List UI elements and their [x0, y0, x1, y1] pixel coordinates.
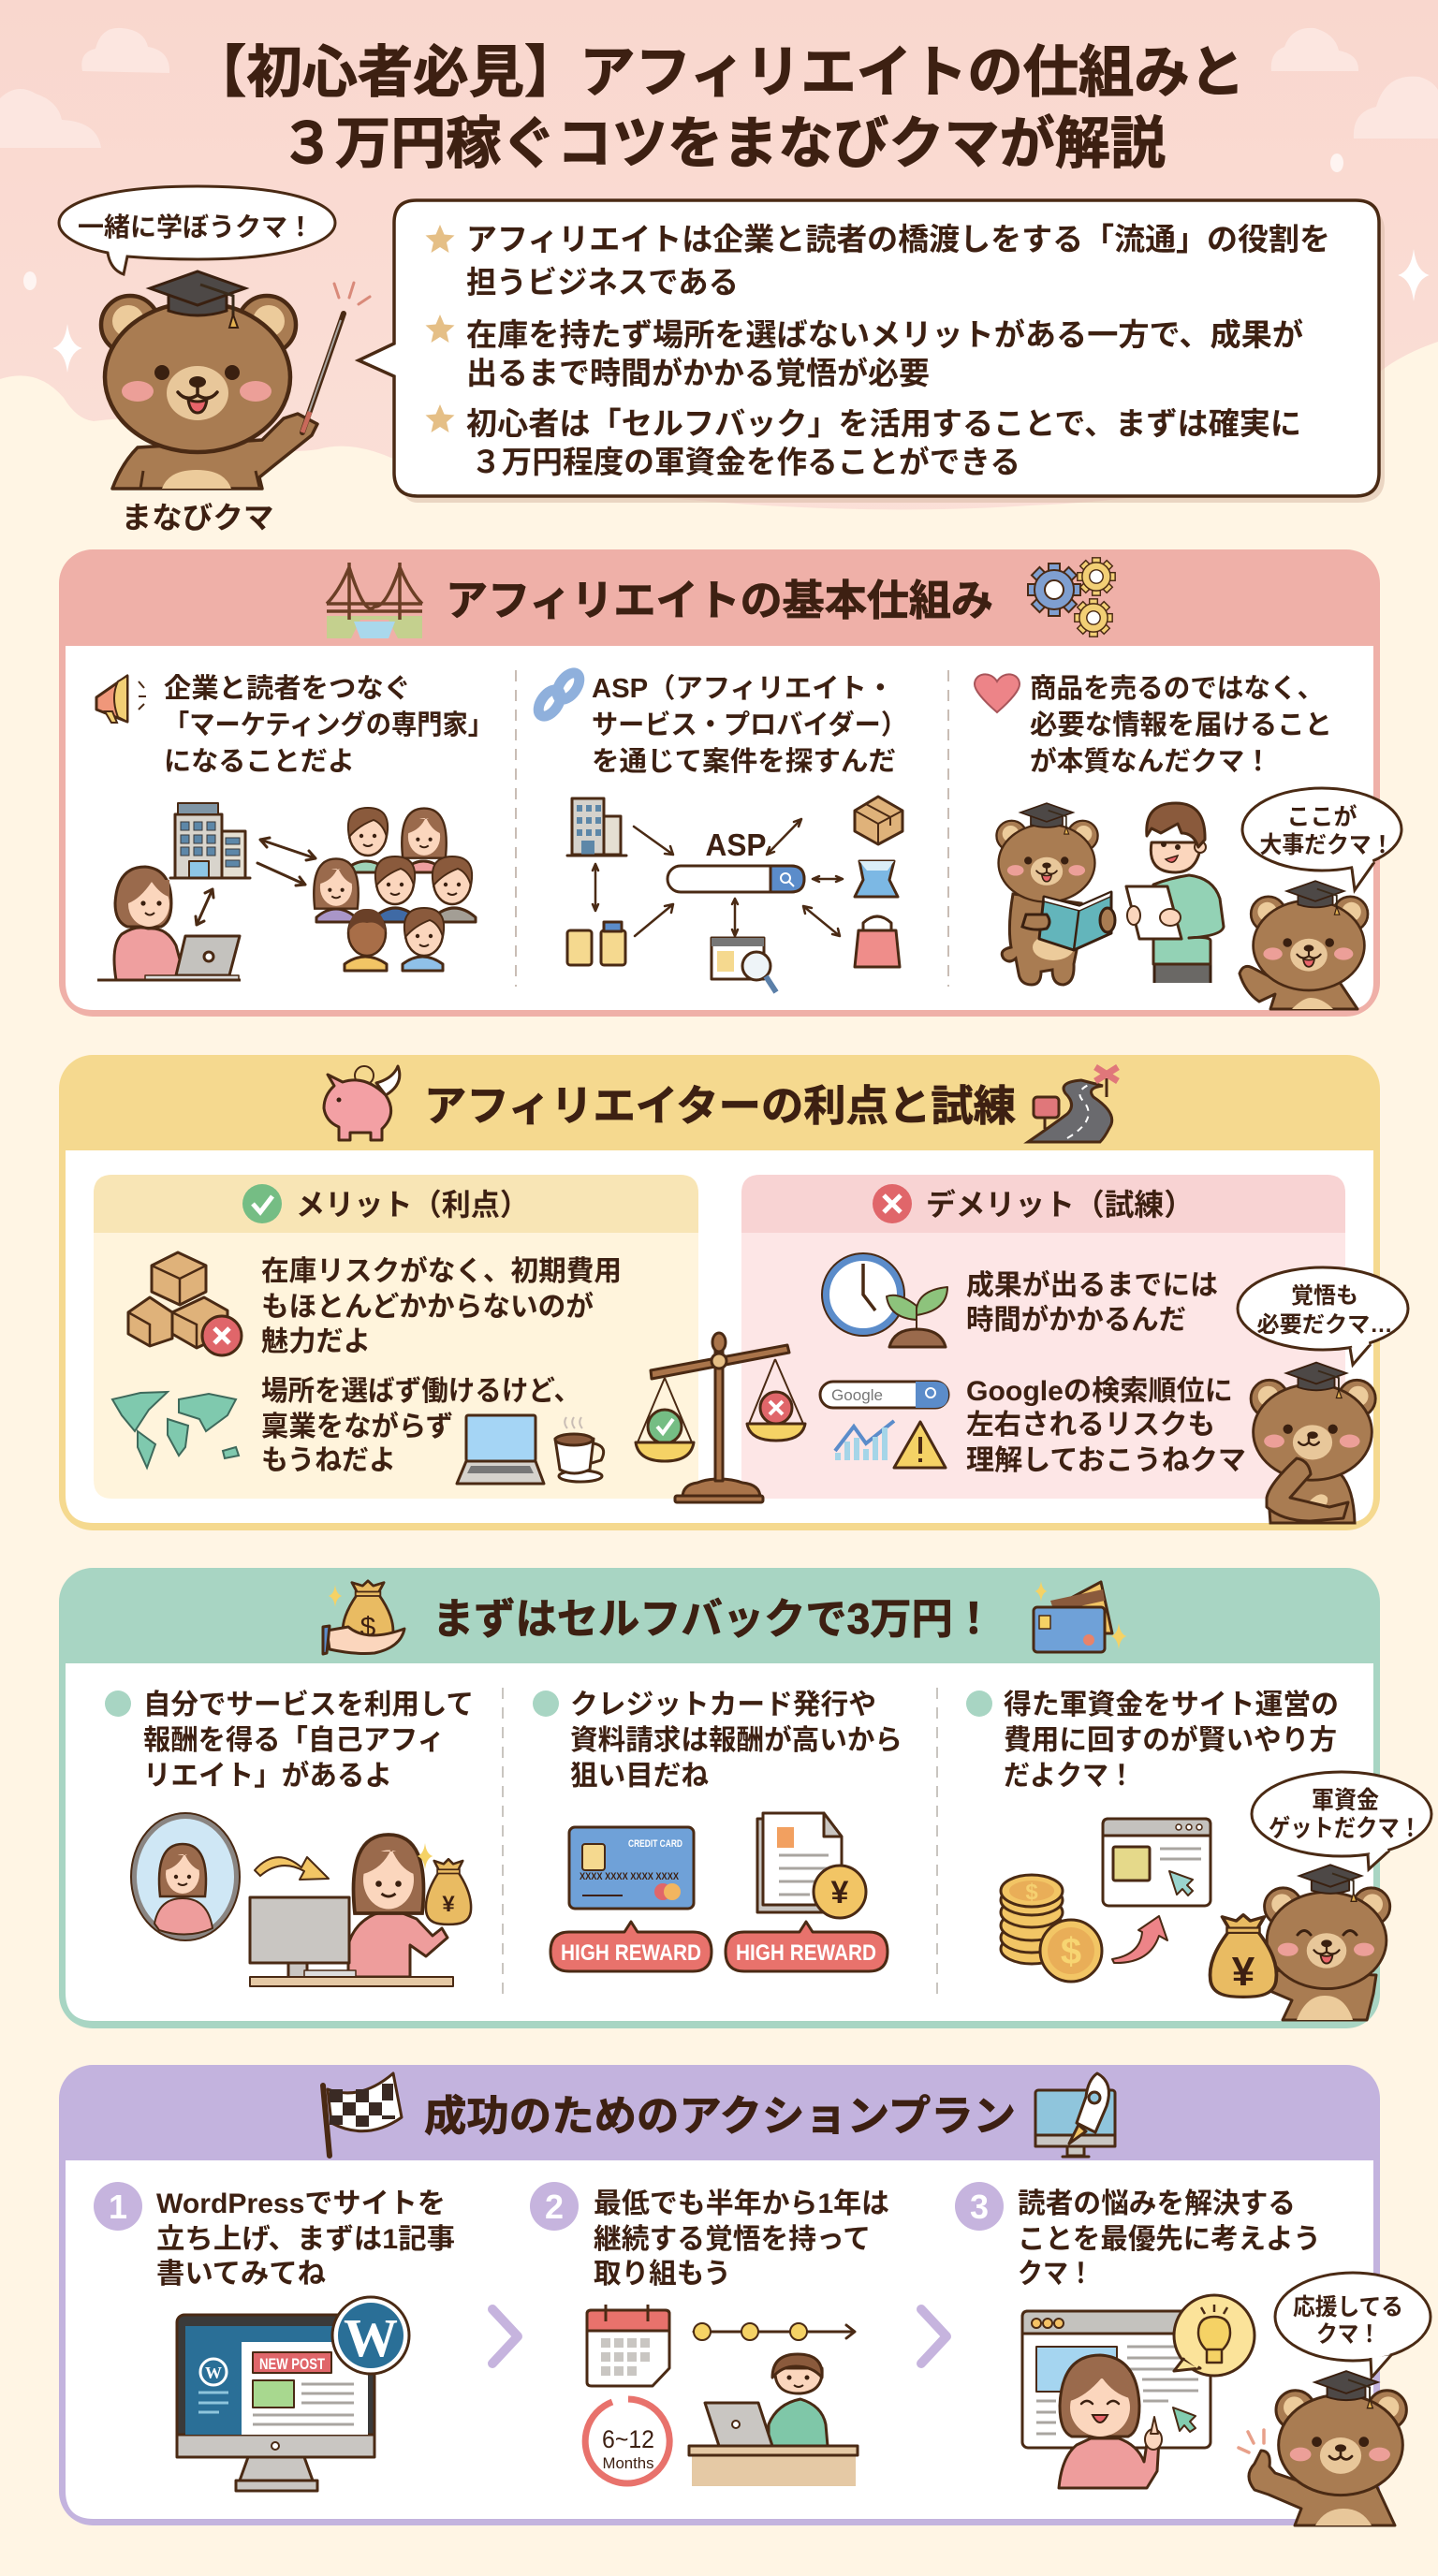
title [191, 41, 1245, 175]
text: invest capital [966, 1690, 1339, 1792]
text: work anywhere: 場所を選ばず働けるけど、 [261, 1376, 580, 1407]
speech bubble: learn together: 一緒に学ぼうクマ！ [78, 212, 314, 242]
speech bubble: cheering [1275, 2273, 1431, 2378]
illustration: reader focus [1022, 2295, 1255, 2488]
step 1: 書いてみてね [156, 2259, 326, 2290]
callout: key points: 初心者は「セルフバック」を活用することで、まずは確実に [466, 406, 1301, 441]
text: essence: が本質なんだクマ！ [1030, 745, 1271, 777]
illustration: coins, browser and arrow: $ [1025, 1880, 1038, 1905]
icon: world map [112, 1392, 239, 1468]
icon: bridge [327, 563, 422, 638]
text: google risk: 理解しておこうねクマ [966, 1445, 1246, 1476]
heading: 成功のためのアクションプラン [424, 2092, 1016, 2140]
text: takes time: 成果が出るまでには [966, 1269, 1218, 1301]
mascot: thumbs-up bear [1239, 2371, 1406, 2525]
illustration: WordPress on monitor: W [205, 2364, 222, 2382]
icon: piggy bank [324, 1066, 400, 1140]
icon: credit cards [1034, 1581, 1126, 1652]
callout: key points: アフィリエイトは企業と読者の橋渡しをする「流通」の役割を [466, 222, 1330, 256]
illustration: self purchase: ¥ [442, 1892, 455, 1917]
heading: アフィリエイターの利点と試練 [424, 1082, 1016, 1130]
badge: high reward: HIGH REWARD [561, 1940, 701, 1966]
text: no inventory risk: 在庫リスクがなく、初期費用 [261, 1255, 622, 1287]
text: ASP [592, 674, 907, 777]
text: takes time [966, 1269, 1218, 1336]
step 2: 2 [545, 2188, 564, 2226]
icon: megaphone [96, 676, 146, 723]
illustration: document with yen [757, 1813, 866, 1918]
icon: balance scale [636, 1333, 805, 1502]
icon: boxes with x [128, 1252, 242, 1355]
mascot bear with pointer [101, 271, 370, 489]
text: self affiliate [105, 1690, 474, 1792]
icon: search ranking warning [820, 1382, 948, 1468]
text: self affiliate: 報酬を得る「自己アフィ [143, 1725, 445, 1756]
text: invest capital: 得た軍資金をサイト運営の [1004, 1690, 1339, 1720]
text: takes time: 時間がかかるんだ [966, 1304, 1186, 1336]
text: marketing specialist: になることだよ [164, 747, 355, 777]
illustration: WordPress on monitor: W [344, 2307, 398, 2368]
text: ASP: ASP（アフィリエイト・ [592, 674, 894, 704]
subpanel: merits: メリット（利点） [296, 1188, 529, 1222]
callout: key points: ３万円程度の軍資金を作ることができる [471, 445, 1020, 479]
mascot name: まなびクマ [122, 501, 273, 534]
text: ASP: を通じて案件を探すんだ [592, 746, 896, 777]
text: no inventory risk: もほとんどかからないのが [261, 1291, 594, 1323]
subpanel: trials: デメリット（試練） [926, 1188, 1194, 1222]
text: no inventory risk [261, 1255, 622, 1357]
text: work anywhere [261, 1376, 580, 1476]
icon: 6 to 12 months ring [585, 2399, 669, 2483]
badge: high reward [726, 1922, 888, 1971]
step 3: ことを最優先に考えよう [1018, 2224, 1321, 2255]
mascot: happy bear with money [1211, 1865, 1390, 2020]
subpanel: merits [94, 1175, 698, 1499]
illustration: document with yen: ¥ [831, 1875, 849, 1910]
speech bubble: learn together [59, 186, 335, 274]
illustration: person at desk [689, 2354, 858, 2486]
panel: self-back [59, 1568, 1431, 2028]
speech bubble: important [1242, 788, 1401, 890]
text: invest capital: 費用に回すのが賢いやり方 [1004, 1724, 1337, 1756]
text: marketing specialist: 企業と読者をつなぐ [164, 673, 411, 704]
text: no inventory risk: 魅力だよ [261, 1326, 371, 1357]
text: google risk [966, 1376, 1246, 1476]
title: 【初心者必見】アフィリエイトの仕組みと [191, 41, 1245, 104]
icon: gears [1028, 558, 1115, 637]
heading: まずはセルフバックで3万円！ [433, 1595, 994, 1643]
icon: hand with money bag [323, 1581, 404, 1654]
icon: chain [534, 669, 584, 720]
text: ASP: サービス・プロバイダー） [592, 709, 907, 740]
illustration: credit card [569, 1827, 694, 1909]
text: google risk: Googleの検索順位に [966, 1376, 1233, 1407]
icon: search ranking warning: Google [831, 1386, 883, 1404]
text: invest capital: だよクマ！ [1004, 1761, 1135, 1792]
speech bubble: got capital: ゲットだクマ！ [1269, 1814, 1421, 1842]
speech bubble: important: 大事だクマ！ [1260, 832, 1393, 858]
illustration: WordPress on monitor [177, 2297, 409, 2491]
text: essence: 必要な情報を届けること [1030, 710, 1332, 740]
step 3: クマ！ [1018, 2259, 1093, 2290]
diagram: ASP network: ASP [706, 827, 766, 862]
panel: basic mechanism [59, 549, 1401, 1017]
text: work anywhere: もうねだよ [261, 1445, 396, 1476]
text: credit card: 狙い目だね [570, 1761, 709, 1792]
callout: key points [359, 200, 1385, 503]
icon: 6 to 12 months ring: Months [603, 2454, 653, 2472]
speech bubble: resolve [1238, 1267, 1408, 1365]
illustration: coins, browser and arrow: $ [1061, 1931, 1081, 1972]
speech bubble: resolve: 覚悟も [1291, 1283, 1358, 1309]
icon: heart [975, 674, 1020, 712]
callout: key points: 在庫を持たず場所を選ばないメリットがある一方で、成果が [466, 317, 1303, 352]
illustration: self purchase [131, 1813, 471, 1986]
arrow [492, 2309, 518, 2364]
speech bubble: cheering: 応援してる [1293, 2294, 1403, 2320]
step 3 [955, 2182, 1321, 2290]
text: essence [1030, 673, 1332, 777]
subpanel: trials [741, 1175, 1345, 1499]
text: essence: 商品を売るのではなく、 [1030, 673, 1324, 704]
illustration: credit card: CREDIT CARD [628, 1838, 682, 1850]
panel: merits and trials [59, 1055, 1408, 1530]
illustration: WordPress on monitor: NEW POST [259, 2355, 325, 2373]
text: credit card: 資料請求は報酬が高いから [570, 1724, 902, 1756]
callout: key points: 出るまで時間がかかる覚悟が必要 [466, 356, 930, 390]
badge: high reward [550, 1922, 712, 1971]
step 3: 3 [970, 2188, 989, 2226]
step 2: 最低でも半年から1年は [594, 2188, 889, 2219]
icon: coffee [555, 1417, 604, 1482]
step 2: 取り組もう [594, 2259, 731, 2290]
mascot: small bear [1240, 881, 1368, 1009]
badge: high reward: HIGH REWARD [736, 1940, 876, 1966]
step 3: 読者の悩みを解決する [1018, 2188, 1296, 2219]
illustration: calendar and timeline [587, 2305, 855, 2386]
text: credit card: クレジットカード発行や [570, 1690, 876, 1720]
arrow [921, 2309, 946, 2364]
title: ３万円稼ぐコツをまなびクマが解説 [280, 112, 1166, 175]
diagram: ASP network [567, 797, 902, 992]
speech bubble: got capital: 軍資金 [1312, 1786, 1379, 1814]
step 1: WordPressでサイトを [156, 2188, 446, 2219]
icon: clock and sprout [822, 1253, 947, 1347]
illustration: coins, browser and arrow [1001, 1819, 1211, 1982]
text: marketing specialist: 「マーケティングの専門家」 [164, 710, 493, 740]
mascot: thinking bear [1251, 1363, 1375, 1523]
mascot: happy bear with money: ¥ [1232, 1949, 1255, 1995]
step 1 [94, 2182, 455, 2290]
heading: アフィリエイトの基本仕組み [446, 577, 993, 624]
speech bubble: cheering: クマ！ [1316, 2321, 1380, 2348]
text: work anywhere: 稟業をながらず [261, 1411, 453, 1442]
callout: key points: 担うビジネスである [466, 265, 739, 300]
step 2: 継続する覚悟を持って [594, 2224, 871, 2255]
step 2 [530, 2182, 889, 2290]
speech bubble: got capital [1252, 1772, 1431, 1869]
illustration: credit card: XXXX XXXX XXXX XXXX [580, 1871, 680, 1882]
panel: action plan [59, 2065, 1431, 2525]
speech bubble: resolve: 必要だクマ… [1256, 1312, 1393, 1338]
text: self affiliate: リエイト」があるよ [143, 1760, 392, 1792]
icon: winding road [1028, 1067, 1118, 1142]
illustration: bear reading with person [996, 803, 1224, 985]
icon: hand with money bag: $ [360, 1612, 376, 1643]
step 1: 立ち上げ、まずは1記事 [156, 2224, 455, 2255]
text: google risk: 左右されるリスクも [966, 1410, 1215, 1441]
illustration: company, blogger and readers [97, 803, 476, 980]
icon: rocket and monitor [1035, 2073, 1115, 2157]
icon: checkered flag [323, 2073, 402, 2156]
text: credit card [533, 1690, 902, 1792]
icon: 6 to 12 months ring: 6~12 [602, 2425, 654, 2453]
step 1: 1 [109, 2188, 127, 2226]
icon: laptop [457, 1415, 544, 1484]
text: marketing specialist [164, 673, 493, 777]
speech bubble: important: ここが [1286, 803, 1357, 830]
text: self affiliate: 自分でサービスを利用して [143, 1690, 474, 1720]
